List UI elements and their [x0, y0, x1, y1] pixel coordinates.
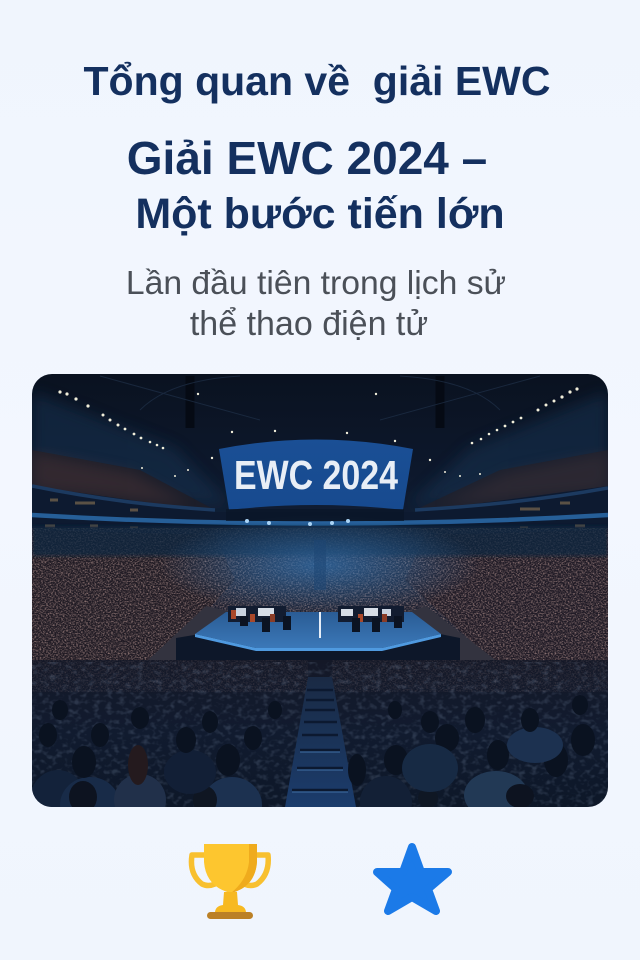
trophy stem and base	[215, 892, 246, 913]
screen text: EWC 2024	[234, 452, 398, 498]
upper stands left and right	[32, 450, 608, 510]
icon: blue star	[373, 843, 452, 915]
players right	[338, 606, 404, 632]
icon: gold trophy	[188, 844, 271, 919]
arena roof	[32, 374, 608, 514]
title: Tổng quan về giải EWC	[84, 58, 550, 104]
spot lights below screen	[245, 519, 350, 526]
heading: Giải EWC 2024: Giải EWC 2024 –	[127, 132, 487, 184]
audience foreground	[32, 660, 608, 807]
floor paths around stage	[146, 606, 498, 662]
jumbotron screen	[219, 440, 413, 526]
balcony rings	[32, 486, 608, 530]
subtitle line 2: thể thao điện tử	[190, 305, 428, 343]
ceiling lights	[58, 387, 579, 477]
trophy handles	[191, 855, 268, 886]
subtitle line 1: Lần đầu tiên trong lịch sử	[126, 264, 506, 302]
center aisle steps	[285, 677, 356, 807]
heading: Một bước tiến lớn: Một bước tiến lớn	[135, 190, 505, 238]
lower bowl crowd base	[32, 515, 608, 665]
heads and shoulders	[32, 695, 595, 807]
trophy cup	[204, 844, 257, 893]
players left	[228, 606, 291, 632]
arena photo illustration	[32, 374, 608, 807]
stage	[176, 606, 460, 666]
